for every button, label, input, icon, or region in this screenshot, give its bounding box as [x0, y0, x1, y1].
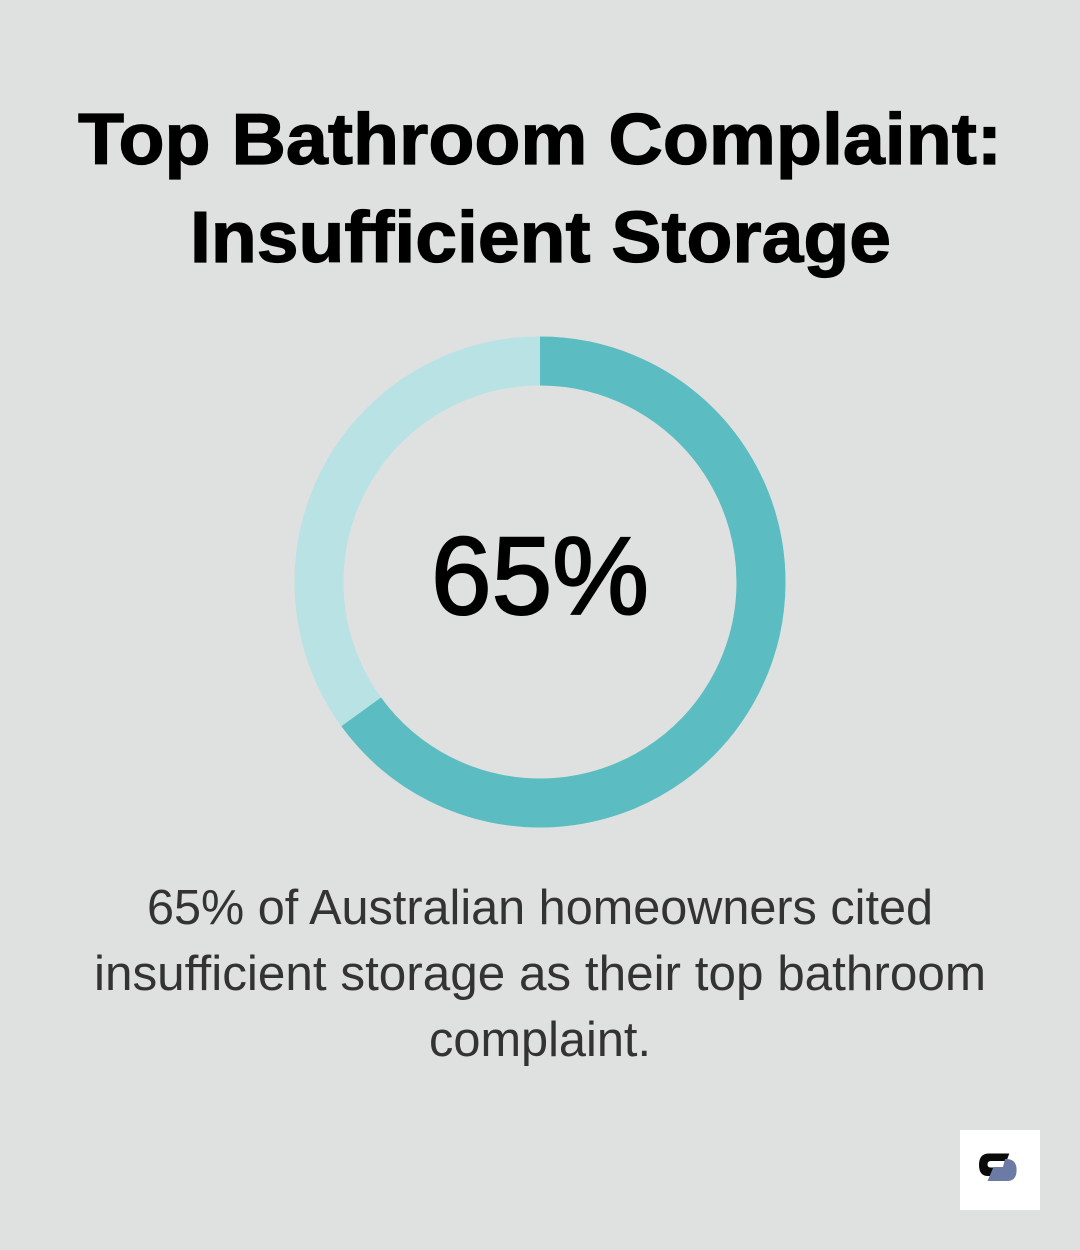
- description text: [94, 881, 986, 1067]
- icon: logo blue stroke: [988, 1159, 1017, 1181]
- description text: complaint.: [429, 1013, 651, 1067]
- description text: insufficient storage as their top bathroom: [94, 947, 986, 1001]
- donut value label: 65%: [431, 515, 649, 638]
- donut chart: 65 percent: [319, 361, 761, 803]
- logo badge: [960, 1130, 1040, 1210]
- title: Insufficient Storage: [190, 198, 891, 278]
- title: Top Bathroom Complaint:: [78, 100, 1002, 180]
- description text: 65% of Australian homeowners cited: [147, 881, 933, 935]
- icon: logo black stroke: [979, 1154, 1009, 1176]
- title: [78, 100, 1002, 278]
